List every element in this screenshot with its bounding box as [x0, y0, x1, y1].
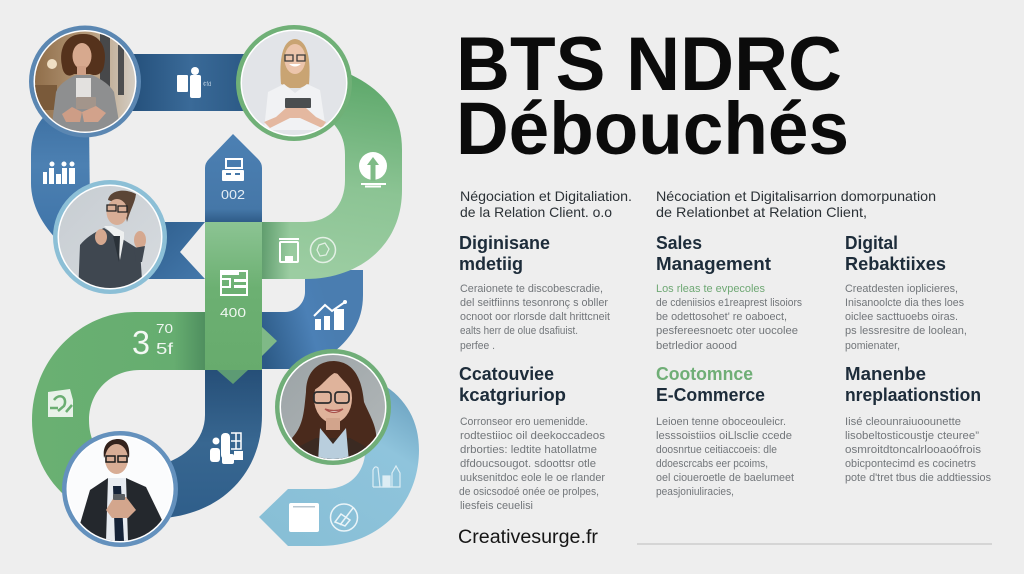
- ribbon: light blue arrow curve: [259, 380, 419, 546]
- panel: Digital Rebaktiixes: Inisanoolcte dia thes loes: [845, 297, 964, 309]
- ribbon: blue up arrow: [205, 134, 262, 222]
- panel: Sales Management: Management: [656, 253, 771, 274]
- icon: person and document: ¢fd: [203, 82, 211, 88]
- title: BTS NDRC: [456, 22, 842, 107]
- icon: screen and keypad: [222, 159, 244, 181]
- label: 3 70 5f: [132, 321, 174, 361]
- title: Débouchés: [456, 87, 849, 170]
- panel: Sales Management: de cdeniisios e1reaprest lisoiors: [656, 297, 802, 309]
- panel: Digital Rebaktiixes: Digital: [845, 232, 898, 253]
- arrow: green down tip: [217, 370, 248, 384]
- panel: Manenbe nreplaationstion: Iisé cleounraiuoounette: [845, 416, 961, 428]
- panel: Manenbe nreplaationstion: lisobeltosticoustje cteuree”: [845, 430, 979, 442]
- panel: Ccatouviee kcatgriuriop: de osicsodoé onée oe prolpes,: [459, 486, 599, 498]
- panel: Diginisane mdetiig: ealts herr de olue dsafiuist.: [460, 325, 578, 337]
- panel: Cootomnce E-Commerce: ddoescrcabs eer pcoims,: [656, 458, 768, 470]
- intro text: left: de la Relation Client. o.o: [460, 204, 612, 220]
- panel: Digital Rebaktiixes: Creatdesten ioplicieres,: [845, 283, 958, 295]
- intro text: left: Négociation et Digitaliation.: [460, 188, 632, 204]
- intro text: right: de Relationbet at Relation Client,: [656, 204, 867, 220]
- panel: Cootomnce E-Commerce: Leioen tenne oboceouleicr.: [656, 416, 786, 428]
- ribbon: top dark blue: [130, 54, 250, 111]
- panel: Cootomnce E-Commerce: E-Commerce: [656, 384, 765, 405]
- icon: bottles outline: [373, 466, 400, 487]
- panel: Ccatouviee kcatgriuriop: drborties: ledtite hatollatme: [460, 444, 597, 456]
- title: [456, 22, 849, 170]
- label: 3 70 5f: 5f: [156, 341, 174, 358]
- panel: Sales Management: be odettosohet' re oaboect,: [656, 311, 787, 323]
- panel: Digital Rebaktiixes: oiclee sacttuoebs oiras.: [845, 311, 958, 323]
- ribbon: right blue: [262, 270, 363, 369]
- panel: Sales Management: betrledior aoood: [656, 340, 737, 352]
- portrait: woman curly hair: [29, 26, 142, 140]
- icon: person and document: [177, 67, 211, 98]
- ribbon: center green block: [205, 222, 262, 370]
- panel: Ccatouviee kcatgriuriop: liesfeis ceuelisi: [460, 500, 533, 512]
- icon: people and building: [210, 433, 243, 464]
- label: 400: 400: [220, 305, 246, 320]
- label: 3 70 5f: 70: [156, 321, 173, 336]
- panel: Manenbe nreplaationstion: osmroitdtoncalrlooaoófrois: [845, 444, 982, 456]
- panel: Sales Management: Los rleas te evpecoles: [656, 283, 765, 295]
- icon: layout panel: [221, 271, 247, 295]
- panel: Manenbe nreplaationstion: pote d'tret tbus die addtiessios: [845, 472, 991, 484]
- icon: bar chart with people: [43, 162, 75, 184]
- panel: Ccatouviee kcatgriuriop: kcatgriuriop: [459, 384, 566, 405]
- icon: round badge: [310, 238, 336, 262]
- panel: Sales Management: pesfereesnoetc oter uocolee: [656, 325, 798, 337]
- panel: Ccatouviee kcatgriuriop: dfdoucsougot. sdoottsr otle: [460, 458, 596, 470]
- panel: Diginisane mdetiig: perfee .: [460, 340, 495, 352]
- panel: Diginisane mdetiig: ocnoot oor rlorsde dalt hrittcneit: [460, 311, 610, 323]
- panel: Diginisane mdetiig: Diginisane: [459, 232, 550, 253]
- panel: Ccatouviee kcatgriuriop: uuksenitdoc eole le oe rlander: [460, 472, 605, 484]
- ribbon: lower dark blue curve: [160, 365, 262, 518]
- intro text: right: [656, 188, 936, 220]
- icon: tablet: [279, 238, 299, 262]
- portrait: blonde woman with tablet: [236, 25, 352, 142]
- icon: white calendar square: [289, 503, 319, 532]
- panel: Manenbe nreplaationstion: obicpontecimd es cocinetrs: [845, 458, 976, 470]
- portrait: woman brown hair close-up: [275, 349, 391, 466]
- panel: Cootomnce E-Commerce: peasjoniuliracies,: [656, 486, 734, 498]
- panel: Ccatouviee kcatgriuriop: Ccatouviee: [459, 363, 554, 384]
- portrait: man in suit gesturing: [53, 180, 167, 295]
- panel: Sales Management: Sales: [656, 232, 702, 253]
- icon: target with arrow: [359, 152, 387, 188]
- panel: Digital Rebaktiixes: [845, 232, 967, 352]
- ribbon: left blue: [31, 100, 90, 243]
- diagram: ribbon pathway: [29, 25, 419, 547]
- panel: Ccatouviee kcatgriuriop: [459, 363, 606, 512]
- icon: growth chart: [314, 300, 347, 330]
- panel: Cootomnce E-Commerce: [656, 363, 794, 498]
- icon: head profile: [48, 389, 73, 417]
- panel: Cootomnce E-Commerce: oel cioueroetle de baelumeet: [656, 472, 794, 484]
- ribbon: right green curve: [262, 72, 402, 279]
- panel: Cootomnce E-Commerce: doosnrtue ceitiaccoeis: dle: [656, 444, 777, 456]
- ribbon: notched blue arrow: [145, 222, 205, 279]
- panel: Cootomnce E-Commerce: Cootomnce: [656, 363, 753, 384]
- panel: Cootomnce E-Commerce: lesssoistiios oiLlsclie ccede: [656, 430, 792, 442]
- label: 002: 002: [221, 187, 245, 202]
- icon: crossed circle: [330, 504, 358, 531]
- panel: Diginisane mdetiig: mdetiig: [459, 253, 523, 274]
- panel: Manenbe nreplaationstion: nreplaationstion: [845, 384, 981, 405]
- intro text: right: Nécociation et Digitalisarrion domorpunation: [656, 188, 936, 204]
- panel: Ccatouviee kcatgriuriop: rodtestiioc oil deekoccadeos: [460, 430, 606, 442]
- panel: Diginisane mdetiig: Ceraionete te discobescradie,: [460, 283, 603, 295]
- arrow: green right tip: [262, 327, 277, 356]
- panel: Diginisane mdetiig: [459, 232, 610, 352]
- panel: Diginisane mdetiig: del seitfiinns tesonronç s obller: [460, 297, 608, 309]
- panel: Digital Rebaktiixes: ps lessresitre de loolean,: [845, 325, 967, 337]
- label: 3 70 5f: 3: [132, 324, 150, 361]
- intro text: left: [460, 188, 632, 220]
- panel: Digital Rebaktiixes: Rebaktiixes: [845, 253, 946, 274]
- ribbon: left green curve: [32, 312, 205, 500]
- panel: Ccatouviee kcatgriuriop: Corronseor ero uemenidde.: [460, 416, 588, 428]
- footer: website: Creativesurge.fr: [458, 527, 599, 548]
- panel: Manenbe nreplaationstion: [845, 363, 991, 484]
- panel: Sales Management: [656, 232, 802, 352]
- panel: Manenbe nreplaationstion: Manenbe: [845, 363, 926, 384]
- panel: Digital Rebaktiixes: pomienater,: [845, 340, 900, 352]
- portrait: man in black suit with phone: [62, 431, 178, 547]
